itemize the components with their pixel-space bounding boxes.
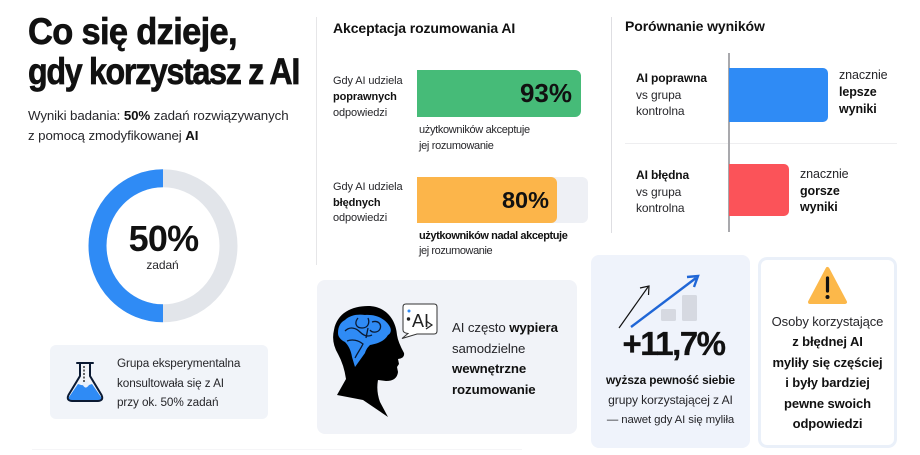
row label: AI wrong: AI błędna [636, 168, 689, 182]
row label: AI correct: vs grupa [636, 88, 681, 102]
bar caption [418, 230, 568, 257]
panel text: samodzielne [452, 341, 525, 356]
panel: AI displaces reasoning [317, 280, 577, 434]
stat description: wyższa pewność siebie [606, 373, 735, 387]
panel text: wewnętrzne [452, 361, 526, 376]
warning text: pewne swoich [784, 396, 871, 411]
bar caption: jej rozumowanie [419, 140, 494, 152]
bar label: better results [839, 68, 888, 116]
panel text: Grupa eksperymentalna [117, 357, 240, 370]
icon: head with brain and AI bubble: AI [412, 311, 429, 331]
row label: wrong: odpowiedzi [333, 212, 387, 224]
row label: correct: Gdy AI udziela [333, 75, 403, 87]
stat description [606, 373, 735, 426]
panel text [117, 357, 240, 409]
bar label: worse results [800, 167, 849, 214]
title [28, 11, 299, 92]
stat description: — nawet gdy AI się myliła [607, 414, 734, 426]
title: Co się dzieje, [28, 11, 237, 52]
panel text: konsultowała się z AI [117, 376, 224, 390]
warning text: Osoby korzystające [772, 314, 883, 329]
bar: better [729, 68, 828, 122]
icon: flask [66, 362, 104, 402]
panel: experimental group [50, 345, 268, 419]
heading: Porównanie wyników [625, 18, 765, 34]
section: AI reasoning acceptance [316, 17, 591, 265]
axis [728, 53, 730, 232]
donut caption: zadań [146, 258, 179, 272]
bar label: better results: lepsze [839, 85, 877, 99]
section: results comparison [611, 17, 901, 233]
row label: AI correct [636, 71, 708, 118]
subtitle: z pomocą zmodyfikowanej AI [28, 128, 198, 143]
bar value: 93% [520, 78, 572, 108]
divider [625, 143, 897, 144]
bar caption: użytkowników akceptuje [419, 124, 530, 136]
panel text [452, 320, 558, 397]
title: gdy korzystasz z AI [28, 51, 299, 92]
bar: 80% [417, 177, 557, 223]
panel: confidence stat [591, 255, 750, 448]
row label: AI wrong [636, 168, 690, 215]
panel: warning [758, 257, 897, 448]
row label: wrong: Gdy AI udziela [333, 181, 403, 193]
bottom rule [32, 449, 522, 450]
warning text: myliły się częściej [772, 355, 883, 370]
row label: wrong: błędnych [333, 196, 380, 208]
row label: AI correct: kontrolna [636, 104, 684, 118]
subtitle [28, 108, 288, 143]
icon: head with brain and AI bubble [333, 304, 438, 417]
bar value: 80% [502, 187, 549, 213]
row label: correct [333, 75, 403, 119]
bar label: worse results: wyniki [800, 200, 838, 214]
panel text: przy ok. 50% zadań [117, 396, 218, 409]
bar caption: użytkowników nadal akceptuje [419, 230, 567, 242]
bar label: worse results: gorsze [800, 184, 840, 198]
donut chart: 50% of tasks [88, 169, 238, 322]
bar label: better results: wyniki [839, 102, 877, 116]
donut value: 50% [129, 218, 198, 259]
panel text: AI często wypiera [452, 320, 558, 335]
warning text: odpowiedzi [793, 416, 862, 431]
row label: AI wrong: vs grupa [636, 184, 681, 198]
icon: warning triangle [808, 266, 848, 304]
bar caption [418, 124, 530, 152]
subtitle: Wyniki badania: 50% zadań rozwiązywanych [28, 108, 288, 123]
heading: Akceptacja rozumowania AI [333, 20, 515, 36]
bar track [417, 177, 588, 223]
stat description: grupy korzystającej z AI [608, 392, 733, 406]
icon: rising arrows and bars [618, 274, 700, 328]
warning text [772, 314, 883, 431]
bar label: worse results: znacznie [800, 167, 849, 181]
bar: worse [729, 164, 789, 216]
bar caption: jej rozumowanie [419, 245, 492, 257]
bar label: better results: znacznie [839, 68, 888, 82]
stat value: +11,7% [622, 325, 725, 362]
bar: 93% [417, 70, 581, 117]
warning text: z błędnej AI [792, 334, 863, 349]
row label: AI wrong: kontrolna [636, 201, 684, 215]
row label: correct: poprawnych [333, 91, 397, 103]
row label: correct: odpowiedzi [333, 107, 387, 119]
panel text: rozumowanie [452, 382, 536, 397]
warning text: i były bardziej [785, 375, 870, 390]
row label: AI correct: AI poprawna [636, 71, 707, 85]
row label: wrong [333, 181, 403, 224]
